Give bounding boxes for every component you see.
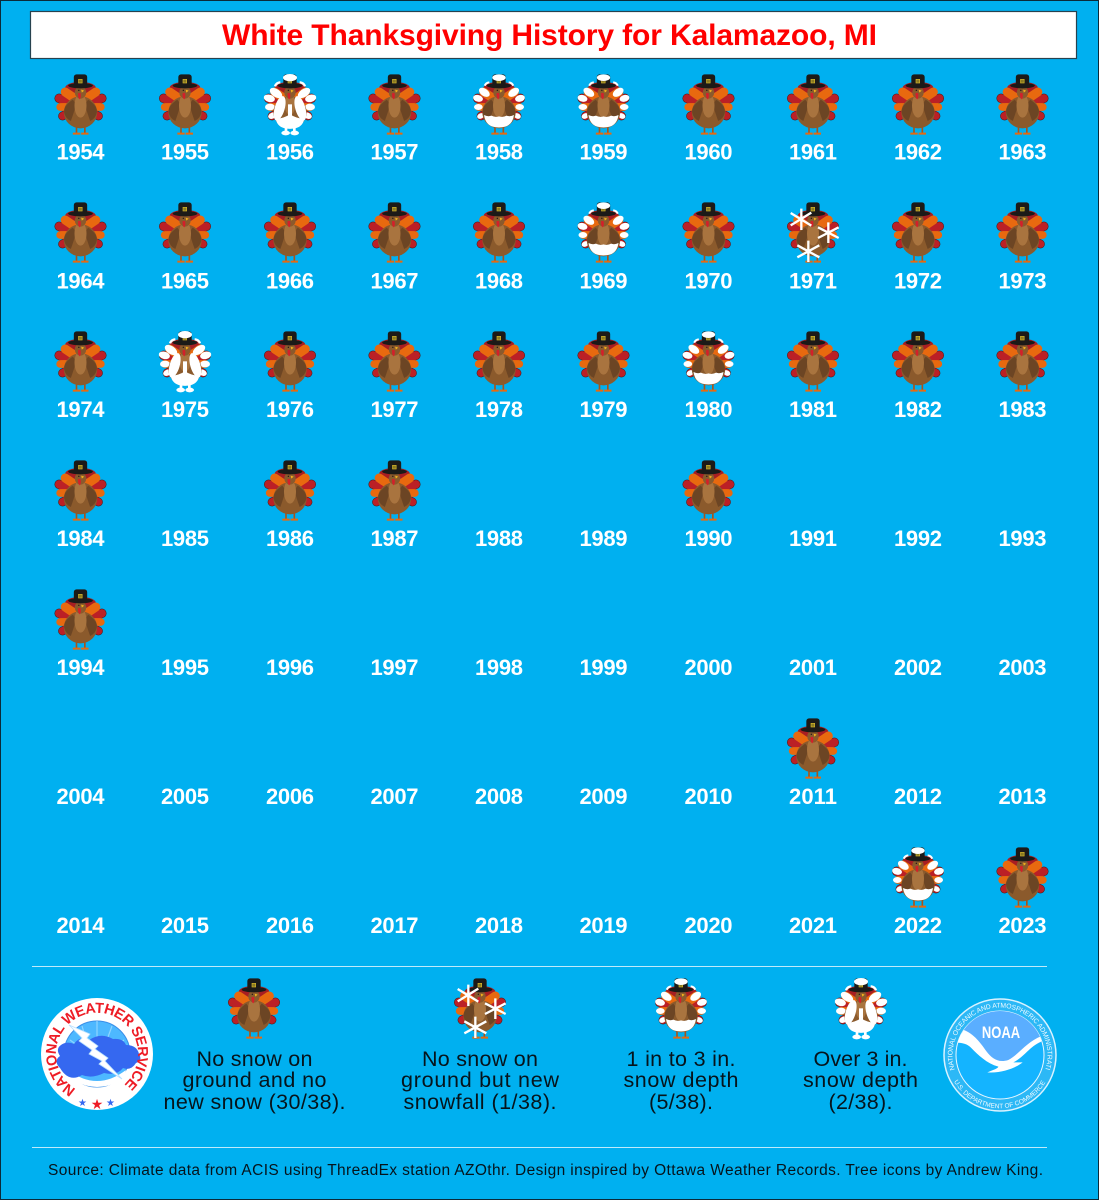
year 1967: [370, 202, 418, 294]
year 1994: [56, 589, 105, 680]
year 2013: 2013: [998, 784, 1046, 809]
year 1975: [158, 331, 212, 422]
legend: 1 to 3 inches: snow depth: [624, 1068, 738, 1092]
year 2004: 2004: [56, 784, 105, 809]
year 1969: 1969: [580, 268, 628, 294]
legend: no snow: new snow (30/38).: [164, 1090, 346, 1114]
year 1971: [789, 202, 839, 294]
year 1959: [577, 74, 630, 164]
legend: 1 to 3 inches: 1 in to 3 in.: [626, 1047, 736, 1071]
year 1993: 1993: [998, 526, 1046, 551]
year 2014: 2014: [56, 913, 105, 938]
year 1996: 1996: [266, 655, 314, 680]
year 1994: 1994: [56, 655, 105, 680]
year 1982: 1982: [894, 397, 942, 422]
year 2011: 2011: [789, 784, 837, 809]
legend: new snowfall: No snow on: [422, 1047, 538, 1071]
year 1977: 1977: [370, 397, 418, 422]
year 1985: 1985: [161, 526, 209, 551]
year 1986: 1986: [266, 526, 314, 551]
year 1960: [684, 74, 732, 164]
year 2011: [789, 718, 837, 809]
year 1989: 1989: [580, 526, 628, 551]
legend: over 3 inches: (2/38).: [828, 1090, 892, 1114]
year 1960: 1960: [684, 140, 732, 164]
year 1981: [789, 331, 837, 422]
year 1982: [894, 331, 942, 422]
legend: 1 to 3 inches: [624, 978, 738, 1114]
year 1973: 1973: [998, 268, 1046, 294]
year 1981: 1981: [789, 397, 837, 422]
year 1976: [266, 331, 314, 422]
year 1970: [684, 202, 732, 294]
year 1973: [998, 202, 1046, 294]
year 1963: [998, 74, 1046, 164]
year 1984: [56, 460, 105, 551]
legend: no snow: No snow on: [196, 1047, 312, 1071]
stars: ★: [106, 1098, 115, 1109]
year 1995: 1995: [161, 655, 209, 680]
year 1979: [580, 331, 628, 422]
year 1983: 1983: [998, 397, 1046, 422]
year 1965: [161, 202, 209, 294]
logo: National Weather Service: [41, 998, 153, 1112]
year 1956: [263, 74, 317, 164]
legend: over 3 inches: Over 3 in.: [814, 1047, 908, 1071]
year 2020: 2020: [684, 913, 732, 938]
year 1964: [56, 202, 105, 294]
year 2012: 2012: [894, 784, 942, 809]
legend: new snowfall: ground but new: [401, 1068, 559, 1092]
year 1969: [577, 202, 630, 294]
stars: ★: [78, 1098, 87, 1109]
year 1965: 1965: [161, 268, 209, 294]
title: [30, 12, 1076, 58]
year 2003: 2003: [998, 655, 1046, 680]
year 1991: 1991: [789, 526, 837, 551]
legend: over 3 inches: [803, 978, 918, 1114]
year 1968: [475, 202, 523, 294]
year 1986: [266, 460, 314, 551]
year 1992: 1992: [894, 526, 942, 551]
year 1962: [894, 74, 942, 164]
year 1999: 1999: [580, 655, 628, 680]
year 1980: [682, 331, 735, 422]
year 1976: 1976: [266, 397, 314, 422]
year 2018: 2018: [475, 913, 523, 938]
year 1990: [684, 460, 732, 551]
legend: over 3 inches: snow depth: [803, 1068, 918, 1092]
year 2021: 2021: [789, 913, 837, 938]
year 1970: 1970: [684, 268, 732, 294]
year 1955: [161, 74, 209, 164]
legend: 1 to 3 inches: (5/38).: [649, 1090, 713, 1114]
ring text bottom: U.S. DEPARTMENT OF COMMERCE: [954, 1080, 1046, 1108]
year 2002: 2002: [894, 655, 942, 680]
year 1968: 1968: [475, 268, 523, 294]
year 2023: [998, 847, 1046, 938]
year 1956: 1956: [266, 140, 314, 164]
ring text: NATIONAL WEATHER SERVICE: [46, 1002, 148, 1097]
year 1972: 1972: [894, 268, 942, 294]
year 2019: 2019: [580, 913, 628, 938]
year 1959: 1959: [580, 140, 628, 164]
source note: Source: Climate data from ACIS using ThreadEx station AZOthr. Design inspired by Ottawa Weather Records. Tree icons by Andrew King.: [48, 1162, 1043, 1179]
year 2022: [891, 847, 945, 938]
year 2000: 2000: [684, 655, 732, 680]
logo: NOAA: [943, 998, 1057, 1112]
year 2007: 2007: [370, 784, 418, 809]
bird: [955, 1029, 1045, 1072]
year 1971: 1971: [789, 268, 837, 294]
year 1955: 1955: [161, 140, 209, 164]
year grid: [56, 74, 1046, 938]
year 1997: 1997: [370, 655, 418, 680]
year 1980: 1980: [684, 397, 732, 422]
year 1967: 1967: [370, 268, 418, 294]
legend: new snowfall: snowfall (1/38).: [404, 1090, 556, 1114]
year 1974: 1974: [56, 397, 105, 422]
year 1961: 1961: [789, 140, 837, 164]
year 1957: 1957: [370, 140, 418, 164]
year 1983: [998, 331, 1046, 422]
year 1988: 1988: [475, 526, 523, 551]
year 2008: 2008: [475, 784, 523, 809]
year 2017: 2017: [370, 913, 418, 938]
year 1975: 1975: [161, 397, 209, 422]
year 1972: [894, 202, 942, 294]
year 1987: 1987: [370, 526, 418, 551]
year 1958: 1958: [475, 140, 523, 164]
legend: no snow: [164, 978, 346, 1114]
year 1966: 1966: [266, 268, 314, 294]
year 1984: 1984: [56, 526, 105, 551]
year 1954: 1954: [56, 140, 105, 164]
year 1998: 1998: [475, 655, 523, 680]
year 2005: 2005: [161, 784, 209, 809]
year 1966: [266, 202, 314, 294]
year 1974: [56, 331, 105, 422]
logo: NOAA: NOAA: [982, 1025, 1020, 1042]
year 1962: 1962: [894, 140, 942, 164]
ring text: NATIONAL OCEANIC AND ATMOSPHERIC ADMINISTRATION: [948, 1002, 1052, 1070]
year 1957: [370, 74, 418, 164]
year 1958: [472, 74, 526, 164]
year 2022: 2022: [894, 913, 942, 938]
stars: [78, 1096, 115, 1112]
year 1987: [370, 460, 418, 551]
year 1990: 1990: [684, 526, 732, 551]
year 1954: [56, 74, 105, 164]
year 1961: [789, 74, 837, 164]
year 1978: [475, 331, 523, 422]
year 2015: 2015: [161, 913, 209, 938]
year 2016: 2016: [266, 913, 314, 938]
year 2006: 2006: [266, 784, 314, 809]
year 2009: 2009: [580, 784, 628, 809]
year 1977: [370, 331, 418, 422]
year 1964: 1964: [56, 268, 105, 294]
legend: new snowfall: [401, 978, 559, 1114]
year 2010: 2010: [684, 784, 732, 809]
year 1978: 1978: [475, 397, 523, 422]
year 1963: 1963: [998, 140, 1046, 164]
stars: ★: [91, 1096, 103, 1112]
title: White Thanksgiving History for Kalamazoo, MI: [222, 19, 877, 52]
year 2023: 2023: [998, 913, 1046, 938]
year 1979: 1979: [580, 397, 628, 422]
legend: no snow: ground and no: [182, 1068, 327, 1092]
year 2001: 2001: [789, 655, 837, 680]
sky: [962, 1011, 1042, 1061]
